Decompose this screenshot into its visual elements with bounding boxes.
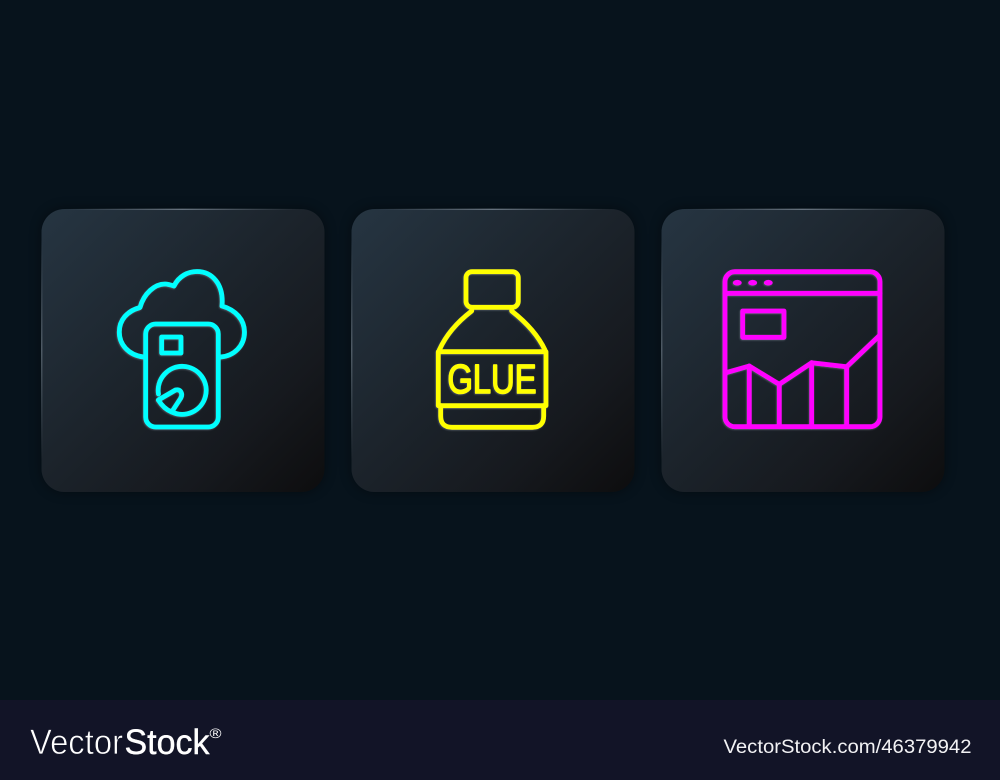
footer bar <box>0 700 1000 780</box>
panel: speaker cloud card <box>41 209 324 492</box>
logo: VectorStock wordmark <box>30 723 222 762</box>
text: GLUE label: GLUE <box>448 356 536 402</box>
logo: VectorStock wordmark: Vector <box>30 723 123 762</box>
logo: VectorStock wordmark: Stock <box>124 723 210 762</box>
text: image id: VectorStock.com/46379942 <box>724 736 972 758</box>
icon: browser window with chart <box>725 272 880 427</box>
panel: glue bottle card <box>351 209 634 492</box>
icon: cloud with speaker <box>119 272 244 427</box>
panel: web chart card <box>661 209 944 492</box>
icon: glue bottle <box>438 272 546 427</box>
logo: VectorStock wordmark: ® <box>210 725 222 741</box>
